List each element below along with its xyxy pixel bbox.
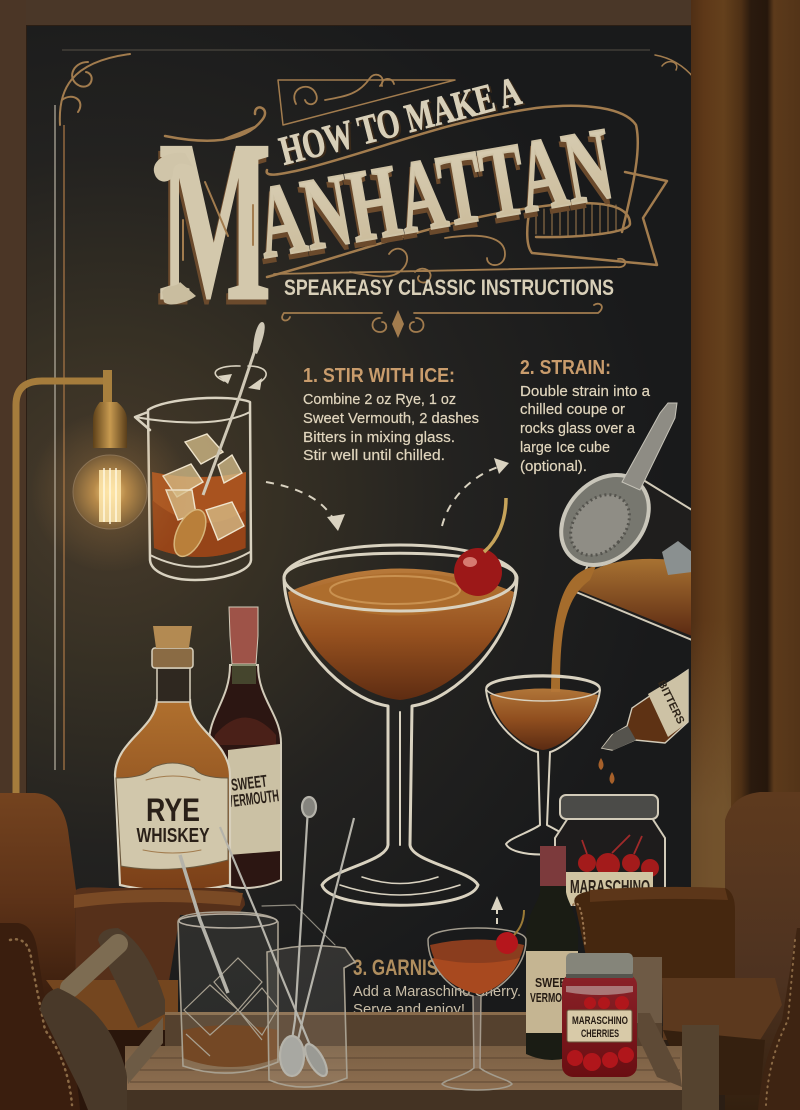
small coupe glass bbox=[486, 675, 600, 854]
large coupe glass bbox=[284, 498, 517, 905]
foreground vermouth bottle: SWEET bbox=[535, 975, 573, 990]
arrow: coupe to strain bbox=[442, 458, 509, 526]
step 2 text: Double strain into a bbox=[520, 384, 651, 400]
bar spoons bbox=[180, 797, 354, 1079]
foreground cocktail glass bbox=[428, 910, 526, 1090]
pouring stream bbox=[551, 566, 596, 692]
heading: Manhattan large M: M bbox=[159, 93, 271, 348]
cherry jar bbox=[555, 795, 665, 905]
heading: how to make a: HOW TO MAKE A bbox=[275, 67, 526, 174]
heading: Manhattan large M bbox=[154, 93, 271, 353]
subtitle: SPEAKEASY CLASSIC INSTRUCTIONS bbox=[284, 275, 614, 300]
step 2 text: rocks glass over a bbox=[520, 421, 636, 437]
heading: how to make a bbox=[275, 67, 528, 176]
foreground cherry jar: MARASCHINO bbox=[572, 1015, 628, 1027]
rye whiskey bottle: WHISKEY bbox=[136, 825, 210, 847]
tray posts right bbox=[633, 957, 719, 1110]
step 2 text: (optional). bbox=[520, 459, 587, 475]
right armchair bbox=[573, 792, 800, 1110]
left armchair bbox=[0, 793, 245, 1110]
filament bbox=[99, 470, 121, 522]
step 1 text bbox=[303, 365, 479, 464]
step 3 text: 3. GARNISH: bbox=[353, 955, 456, 980]
title ornaments and ribbon bbox=[165, 75, 667, 338]
left wing arm with studs bbox=[0, 923, 80, 1110]
arrow: stir to coupe bbox=[266, 482, 345, 531]
foreground vermouth bottle bbox=[526, 846, 580, 1060]
step 3 text: Serve and enjoy! bbox=[353, 1002, 465, 1018]
cut-crystal mixing glass bbox=[178, 912, 278, 1073]
step 1 text: Combine 2 oz Rye, 1 oz bbox=[303, 392, 456, 408]
vermouth bottle (chalk): SWEET bbox=[230, 771, 269, 795]
step 1 text: 1. STIR WITH ICE: bbox=[303, 365, 455, 387]
wooden tray bbox=[40, 928, 719, 1110]
bitters bottle bbox=[598, 670, 688, 784]
heading: how to make a: HOW TO MAKE A bbox=[277, 69, 528, 175]
step 3 text bbox=[353, 955, 521, 1018]
step 1 text: Sweet Vermouth, 2 dashes bbox=[303, 411, 479, 427]
title block bbox=[154, 67, 667, 353]
arrows bbox=[266, 458, 509, 924]
step 2 text: 2. STRAIN: bbox=[520, 357, 611, 379]
foreground cherry jar: CHERRIES bbox=[581, 1028, 619, 1040]
foreground mixing glasses and spoons bbox=[178, 797, 355, 1087]
cherry garnish bbox=[454, 498, 506, 596]
chalk sketch behind beaker bbox=[262, 905, 335, 945]
step 3 text: Add a Maraschino Cherry. bbox=[353, 984, 521, 1000]
step 2 text: chilled coupe or bbox=[520, 402, 625, 418]
rye whiskey bottle bbox=[115, 626, 230, 891]
heading: Manhattan remaining letters bbox=[246, 106, 621, 286]
curtain bbox=[691, 0, 800, 890]
arrow: up to garnish bbox=[491, 896, 503, 924]
beaker glass bbox=[267, 946, 355, 1087]
vermouth bottle (chalk) bbox=[209, 607, 281, 888]
chalkboard panel bbox=[27, 26, 697, 1026]
rye whiskey bottle: RYE bbox=[146, 792, 200, 828]
step 1 text: Stir well until chilled. bbox=[303, 448, 445, 464]
chalk mixing glass bbox=[135, 322, 266, 580]
step 1 text: Bitters in mixing glass. bbox=[303, 430, 455, 446]
step 2 text: large Ice cube bbox=[520, 440, 610, 456]
bitters bottle: BITTERS bbox=[655, 679, 686, 726]
vermouth bottle (chalk): VERMOUTH bbox=[226, 786, 280, 811]
heading: Manhattan large M: M bbox=[157, 98, 269, 353]
cherry jar: MARASCHINO bbox=[570, 877, 650, 897]
step 2 text bbox=[520, 357, 651, 475]
stirring arrows bbox=[215, 366, 266, 390]
wall lamp bbox=[16, 370, 190, 795]
foreground cherry jar bbox=[562, 953, 637, 1077]
foreground vermouth bottle: VERMOUTH bbox=[530, 990, 580, 1005]
tray handle left bbox=[40, 928, 165, 1110]
strainer and pitcher bbox=[543, 403, 692, 692]
right wing arm with studs bbox=[758, 928, 800, 1110]
